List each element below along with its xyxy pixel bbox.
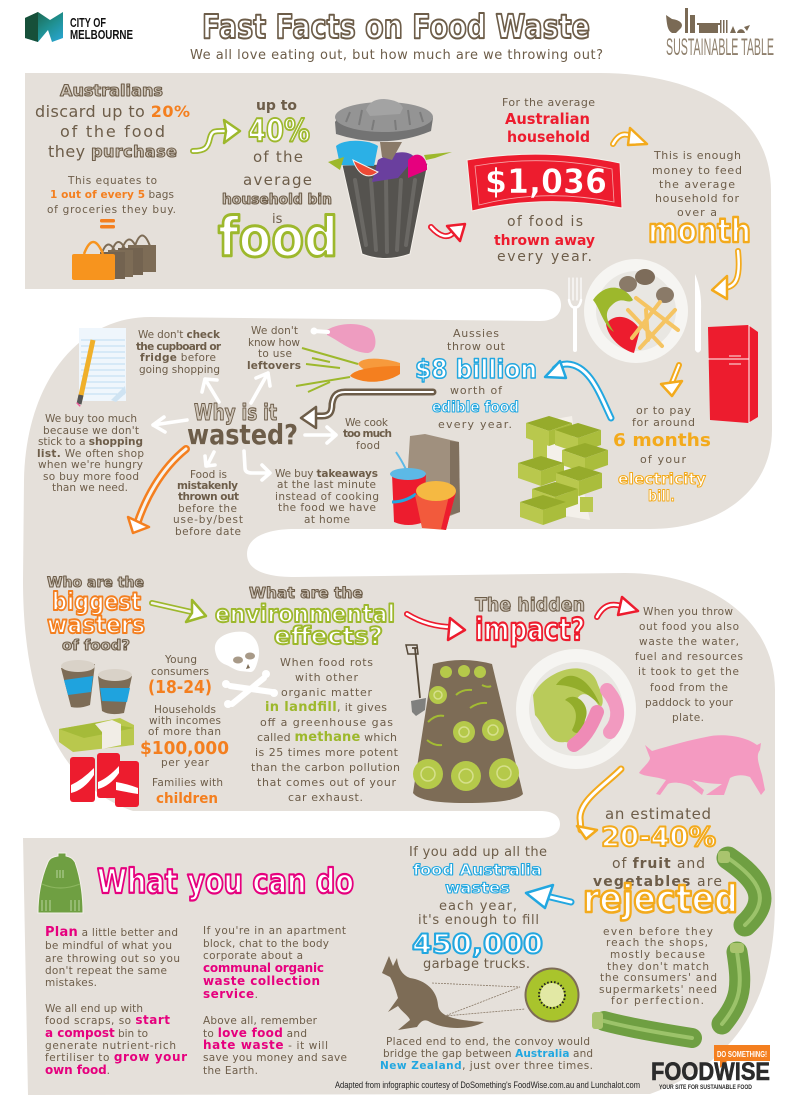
text: mistakenly thrown out: before the (178, 503, 237, 515)
text: cook too much: We cook (345, 417, 389, 429)
text: 450,000 garbage trucks: garbage trucks. (423, 957, 530, 972)
text: Australians discard (35, 81, 190, 161)
heading: environmental effects: environmental (215, 600, 395, 628)
text: leftovers: to use (258, 348, 292, 360)
text: mistakenly thrown out (173, 469, 243, 538)
icon: notepad and pencil (78, 328, 126, 405)
icon: skull and crossbones (215, 632, 278, 708)
subtitle: We all love eating out, but how much are we throwing out? (190, 48, 603, 63)
arrows: white reasons (153, 373, 336, 480)
panel: household waste (35, 81, 758, 525)
dashed sight lines (432, 983, 525, 1016)
text: methane: with other (295, 671, 358, 684)
arrow: brown bent (301, 392, 433, 428)
text: buy too much (37, 413, 144, 494)
heading: who are the biggest wasters: biggest (52, 587, 141, 616)
text: takeaways: We buy takeaways (275, 468, 378, 480)
text: 6 months electricity: for around (632, 416, 695, 429)
text: 450,000 garbage trucks: wastes (445, 879, 510, 897)
text: 20-40% rejected: 20-40% (601, 822, 716, 853)
text: young consumers, households, families: with incomes (149, 715, 221, 727)
icon: kangaroo (382, 956, 484, 1030)
text: before they reach the shops: even before they (603, 926, 713, 938)
text: Australians discard: of the food (60, 122, 165, 141)
text: enough money for a month: the average (659, 178, 735, 191)
icon: stacks of money (518, 416, 608, 525)
heading: who are the biggest wasters (47, 575, 145, 654)
text: young consumers, households, families: $100,000 (140, 738, 229, 759)
icon: shovel (406, 645, 426, 716)
icon: money bundle (59, 718, 134, 752)
text: 450,000 garbage trucks (409, 845, 547, 972)
icon: fork (569, 278, 581, 350)
text: left column tips: don't repeat the same (45, 965, 167, 977)
text: before they reach the shops (599, 926, 717, 1007)
text: cook too much: food (356, 440, 380, 452)
text: methane: than the carbon pollution (251, 761, 400, 774)
heading: who are the biggest wasters: wasters (47, 610, 145, 639)
text: average Australian household (502, 96, 595, 146)
text: hidden resources: paddock to your (645, 697, 734, 709)
text: hidden resources: food from the (650, 682, 728, 694)
icon: takeaway bag, drink and chips (390, 434, 460, 530)
text: left column tips: a compost bin to (45, 1026, 148, 1040)
text: mistakenly thrown out: thrown out (178, 491, 239, 503)
heading: environmental effects: What are the (249, 584, 363, 602)
text: young consumers, households, families: of more than (148, 726, 221, 738)
text: convoy: New Zealand, just over three times. (380, 1060, 593, 1072)
text: cook too much: too much (343, 428, 392, 440)
text: 6 months electricity (613, 404, 711, 505)
text: hidden resources: plate. (672, 712, 704, 724)
text: 450,000 garbage trucks: 450,000 (412, 929, 543, 960)
text: 6 months electricity: 6 months (613, 430, 711, 451)
heading: environmental effects: effects? (274, 622, 383, 650)
text: right column tips (203, 925, 347, 1077)
text: $8 billion: $8 billion (415, 355, 537, 385)
text: 450,000 garbage trucks: food Australia (413, 861, 542, 879)
title: Fast Facts on Food Waste (202, 7, 590, 46)
text: right column tips: waste collection (203, 974, 320, 988)
arrow: green (193, 120, 240, 151)
heading: What you can do: What you can do (97, 862, 354, 902)
text: $8 billion (415, 327, 537, 431)
logo: FoodWise: DO SOMETHING! (717, 1049, 767, 1059)
text: average Australian household: Australian (505, 110, 590, 128)
logo: City of Melbourne: MELBOURNE (70, 27, 133, 42)
text: buy too much: stick to a shopping (38, 436, 143, 448)
icon: pig (639, 735, 765, 795)
text: young consumers, households, families (140, 654, 229, 807)
text: young consumers, households, families: (18-24) (148, 677, 212, 698)
text: Australians discard: they purchase (48, 142, 177, 161)
text: buy too much: when we're hungry (38, 459, 143, 471)
text: $8 billion: edible food (432, 398, 519, 416)
arrow: red to hidden impact (407, 614, 465, 640)
text: right column tips: If you're in an apartment (203, 925, 346, 937)
text: right column tips: service. (203, 987, 258, 1001)
heading: the hidden impact: The hidden (475, 594, 585, 616)
arrow: orange long (128, 449, 186, 533)
text: thrown away every year: of food is (507, 214, 583, 230)
text: methane: is 25 times more potent (255, 746, 399, 759)
text: buy too much: so buy more food (43, 471, 139, 483)
text: check the cupboard: fridge before (140, 352, 216, 364)
text: takeaways: at the last minute (277, 479, 376, 491)
text: mistakenly thrown out: mistakenly (177, 480, 238, 492)
icon: ham leg (310, 324, 375, 353)
text: right column tips: to love food and (203, 1026, 307, 1040)
text: left column tips: mistakes. (45, 977, 97, 989)
text: enough money for a month: month (648, 211, 751, 250)
text: up to 40% food: food (218, 206, 338, 269)
text: left column tips: Plan a little better and (45, 925, 178, 940)
arrow: yellow down (712, 251, 739, 299)
icon: plate of food (584, 259, 688, 363)
text: left column tips: are throwing out so you (45, 953, 180, 965)
text: leftovers (247, 325, 301, 372)
text: Australians discard: discard up to 20% (35, 102, 190, 121)
panel: biggest wasters (47, 575, 765, 1038)
text: check the cupboard: going shopping (139, 364, 220, 376)
text: takeaways: the food we have (278, 502, 376, 514)
text: hidden resources: out food you also (639, 621, 739, 633)
text: methane: that comes out of your (257, 776, 396, 789)
text: left column tips: food scraps, so start (45, 1013, 170, 1027)
text: enough money for a month: This is enough (653, 149, 741, 162)
text: right column tips: the Earth. (203, 1065, 258, 1077)
arrow: blue left (526, 885, 571, 908)
text: right column tips: hate waste - it will (203, 1038, 328, 1052)
text: up to 40% food: average (243, 171, 312, 189)
text: mistakenly thrown out: before date (175, 526, 241, 538)
credit line: Adapted from infographic courtesy of DoSomething's FoodWise.com.au and Lunchalot.com (335, 1080, 640, 1090)
text: mistakenly thrown out: Food is (190, 469, 227, 481)
logo: FoodWise: YOUR SITE FOR SUSTAINABLE FOOD (659, 1084, 752, 1091)
text: 1 out of 5 bags: This equates to (67, 175, 157, 187)
heading: the hidden impact (475, 594, 585, 648)
text: before they reach the shops: mostly because (610, 949, 705, 961)
text: up to 40% food: 40% (248, 113, 310, 149)
text: hidden resources: it took to get the (638, 666, 739, 678)
text: average Australian household: household (507, 128, 590, 146)
text: 1 out of 5 bags: 1 out of every 5 bags (50, 189, 174, 201)
text: methane: When food rots (280, 656, 373, 669)
text: mistakenly thrown out: use-by/best (173, 514, 243, 526)
text: young consumers, households, families: Households (154, 704, 216, 716)
text: up to 40% food: household bin (222, 192, 332, 208)
panel: why is it wasted (37, 324, 460, 538)
text: $8 billion: every year. (438, 418, 512, 431)
text: right column tips: corporate about a (203, 950, 303, 962)
text: left column tips: fertiliser to grow your (45, 1050, 187, 1064)
text: thrown away every year: every year. (497, 249, 592, 265)
icon: plate with lettuce and sausages (516, 649, 636, 769)
text: 20-40% rejected: of fruit and (612, 856, 705, 872)
text: buy too much: because we don't (43, 425, 139, 437)
text: 1 out of 5 bags: of groceries they buy. (47, 204, 176, 216)
text: methane: organic matter (281, 686, 372, 699)
text: 6 months electricity: or to pay (636, 404, 691, 417)
icon: fridge (708, 325, 758, 423)
text: young consumers, households, families: Young (164, 654, 197, 666)
text: 6 months electricity: bill. (648, 487, 675, 505)
text: hidden resources (635, 606, 743, 724)
text: right column tips: Above all, remember (203, 1015, 318, 1027)
text: before they reach the shops: the consumers' and (600, 972, 717, 984)
text: 450,000 garbage trucks: each year, (439, 899, 517, 914)
text: 20-40% rejected: an estimated (605, 805, 711, 823)
text: methane: in landfill, it gives (265, 700, 387, 715)
header (25, 7, 774, 63)
text: check the cupboard: We don't check (138, 329, 221, 341)
arrow: small yellow (661, 365, 682, 396)
text: enough money for a month (648, 149, 751, 250)
text: average Australian household: For the average (502, 96, 595, 109)
text: young consumers, households, families: children (156, 791, 218, 807)
text: takeaways (275, 468, 379, 526)
logo: Sustainable Table (666, 8, 774, 61)
arrow: red curve (597, 597, 638, 617)
text: 20-40% rejected: rejected (583, 877, 738, 921)
text: convoy: bridge the gap between Australia and (383, 1048, 593, 1060)
text: takeaways: instead of cooking (275, 491, 379, 503)
banner: $1,036 (467, 154, 622, 211)
text: 6 months electricity: electricity (618, 470, 706, 488)
text: hidden resources: waste the water, (639, 636, 739, 648)
icon: compost bin (38, 853, 83, 913)
text: methane: called methane which (257, 730, 397, 745)
text: left column tips: own food. (45, 1063, 110, 1077)
heading: who are the biggest wasters: Who are the (47, 575, 144, 591)
text: young consumers, households, families: Families with (152, 777, 223, 789)
text: check the cupboard: the cupboard or (136, 341, 222, 353)
text: $8 billion: worth of (450, 384, 503, 397)
text: up to 40% food: up to (256, 98, 297, 114)
logo: FoodWise: FOODWISE (651, 1058, 770, 1086)
icon: knife (695, 274, 701, 352)
text: enough money for a month: household for (655, 192, 739, 205)
heading: Why is it wasted?: wasted? (187, 418, 298, 451)
text: before they reach the shops: supermarkets' need (599, 984, 717, 996)
icon: zucchini upright (722, 943, 744, 1024)
text: young consumers, households, families: per year (161, 757, 210, 769)
text: 1 out of 5 bags (47, 175, 176, 216)
logo: City of Melbourne: CITY OF (70, 15, 106, 30)
icon: soft drink cans (70, 753, 139, 807)
logo: FoodWise (651, 1045, 770, 1091)
text: buy too much: list. We often shop (37, 448, 144, 460)
icon: zucchini flat (592, 1012, 692, 1038)
icon: rubbish bin with food (328, 99, 452, 258)
text: takeaways: at home (304, 514, 350, 526)
arrow: red (431, 224, 465, 241)
text: hidden resources: fuel and resources (635, 651, 743, 663)
text: $8 billion: Aussies (453, 327, 499, 340)
text: up to 40% food (218, 98, 338, 269)
text: young consumers, households, families: consumers (151, 666, 209, 678)
text: up to 40% food: is (272, 212, 283, 227)
arrow: green straight (152, 600, 206, 622)
text: up to 40% food: of the (253, 148, 303, 166)
text: enough money for a month: over a (677, 206, 717, 219)
icon: coffee cups (61, 660, 132, 714)
text: methane (251, 656, 400, 804)
arrow: yellow long (577, 769, 621, 839)
heading: environmental effects (215, 584, 395, 650)
text: before they reach the shops: reach the shops, (606, 937, 708, 949)
icon: shopping bags (72, 236, 156, 280)
text: leftovers: know how (248, 337, 300, 349)
text: hidden resources: When you throw (643, 606, 733, 618)
equals sign (100, 219, 115, 228)
text: 6 months electricity: of your (640, 453, 686, 466)
heading: the hidden impact: impact? (475, 612, 585, 648)
text: cook too much (343, 417, 392, 452)
text: thrown away every year (494, 214, 595, 265)
text: buy too much: than we need. (52, 482, 128, 494)
text: convoy (380, 1036, 593, 1072)
text: $8 billion: throw out (447, 340, 506, 353)
heading: Why is it wasted?: Why is it (194, 401, 277, 426)
text: before they reach the shops: for perfection. (611, 995, 704, 1007)
text: convoy: Placed end to end, the convoy would (386, 1036, 590, 1048)
heading: Why is it wasted? (187, 401, 298, 451)
text: 20-40% rejected: vegetables are (593, 874, 722, 890)
arrow: blue curve (545, 361, 611, 418)
text: left column tips: We all end up with (45, 1003, 143, 1015)
text: 450,000 garbage trucks: it's enough to fill (418, 913, 539, 928)
icon: zucchini curved (718, 851, 760, 925)
icon: carrots (296, 348, 400, 392)
heading: who are the biggest wasters: of food? (62, 638, 130, 654)
text: left column tips (45, 925, 187, 1077)
text: right column tips: communal organic (203, 961, 324, 975)
text: methane: off a greenhouse gas (260, 716, 393, 729)
text: left column tips: be mindful of what you (45, 940, 172, 952)
text: thrown away every year: thrown away (494, 233, 595, 249)
logo: City of Melbourne (25, 12, 133, 42)
text: methane: car exhaust. (288, 791, 363, 804)
panel: what you can do (38, 845, 770, 1091)
icon: vegetable garden (413, 660, 523, 803)
text: 450,000 garbage trucks: If you add up all the (409, 845, 547, 860)
text: enough money for a month: money to feed (652, 164, 742, 177)
text: check the cupboard (136, 329, 222, 376)
icon: kiwi fruit (524, 968, 580, 1022)
banner: $1,036: $1,036 (485, 162, 607, 202)
text: left column tips: generate nutrient-rich (45, 1040, 176, 1052)
text: leftovers: leftovers (247, 360, 301, 372)
text: buy too much: We buy too much (45, 413, 137, 425)
text: leftovers: We don't (251, 325, 298, 337)
arrow: yellow curve (613, 128, 647, 145)
text: right column tips: block, chat to the body (203, 938, 329, 950)
text: before they reach the shops: they don't match (607, 961, 709, 973)
text: 20-40% rejected (583, 805, 738, 921)
text: right column tips: save you money and save (203, 1052, 347, 1064)
text: Australians discard: Australians (60, 81, 163, 100)
